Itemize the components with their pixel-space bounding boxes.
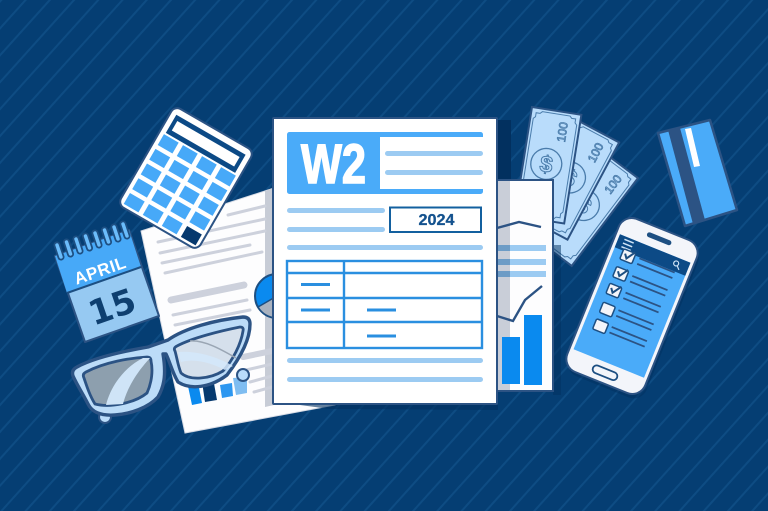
phone app header	[615, 234, 690, 276]
calendar day number: 15	[84, 281, 141, 334]
chart: pie on left paper	[255, 274, 299, 318]
glasses temple tips	[99, 369, 249, 423]
year box	[390, 208, 481, 232]
calculator	[116, 104, 256, 252]
W2 title: W2	[301, 132, 366, 195]
phone checklist	[592, 248, 676, 349]
document: main W2 form	[273, 118, 498, 410]
W2 header	[287, 132, 483, 195]
year box: 2024	[418, 212, 455, 229]
eyeglasses	[72, 317, 250, 423]
calculator keys	[124, 134, 236, 245]
form lines	[287, 208, 483, 382]
chart: bars on left paper	[182, 357, 247, 405]
right lens	[174, 327, 243, 378]
smartphone	[561, 214, 705, 403]
document: left report paper	[141, 188, 335, 433]
calendar: April 15	[55, 224, 159, 342]
left lens	[83, 357, 152, 405]
calendar spiral rings	[57, 224, 127, 257]
credit card	[658, 120, 737, 226]
phone screen	[574, 234, 690, 378]
calendar month label: APRIL	[72, 253, 129, 289]
calculator screen	[166, 115, 246, 173]
document: right chart paper	[497, 120, 561, 395]
form table	[287, 261, 482, 348]
glasses frame	[72, 317, 250, 415]
bar chart	[502, 315, 542, 385]
line chart	[497, 222, 542, 321]
money: three hundred dollar bills	[515, 107, 638, 266]
